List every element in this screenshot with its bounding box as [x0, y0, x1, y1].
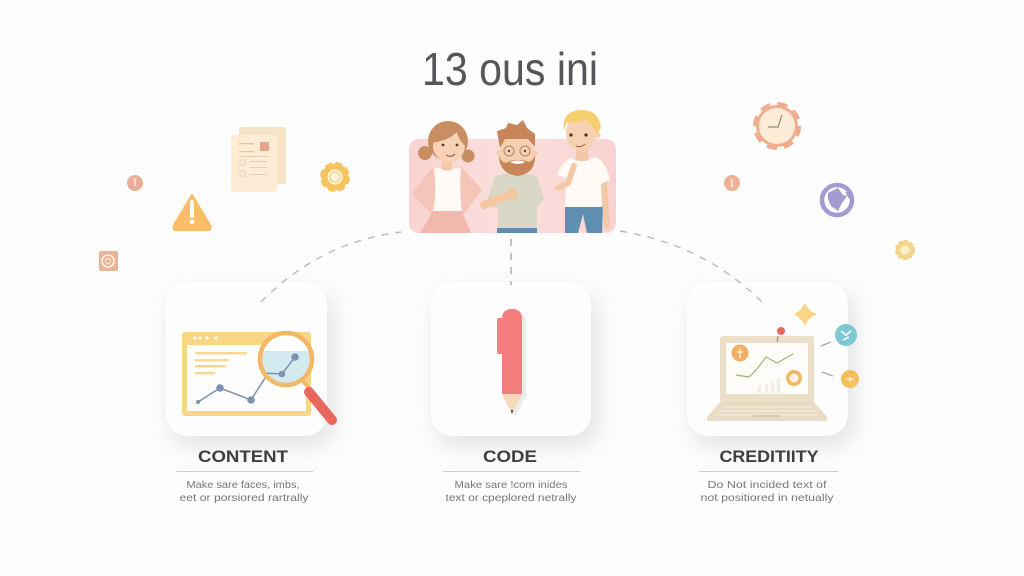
- icon: documents: [231, 127, 286, 192]
- icon: browser window with chart: [182, 332, 311, 416]
- icon: pen: [497, 309, 526, 416]
- person: blond boy: [557, 110, 610, 233]
- description: Do Not incided text of: [708, 479, 827, 491]
- person: girl: [415, 121, 479, 233]
- pink backdrop: [409, 139, 616, 233]
- icon: warning triangle: [173, 195, 211, 230]
- icon: purple globe: [822, 185, 853, 215]
- description: text or cpeplored netrally: [446, 492, 577, 504]
- connector: left dashed arc: [261, 232, 401, 302]
- icon: yellow star: [794, 303, 817, 326]
- icon: gear clock: [756, 104, 798, 148]
- description: Make sare faces, imbs,: [186, 479, 300, 491]
- description: not positiored in netually: [700, 492, 834, 504]
- connector: right dashed arc: [620, 231, 763, 303]
- icon: yellow gear: [322, 164, 348, 190]
- icon: magnifying glass: [258, 333, 332, 420]
- description: Make sare !com inides: [454, 479, 568, 491]
- icon: right info dot: [724, 175, 740, 191]
- title: 13 ous ini: [422, 43, 598, 95]
- description: [180, 479, 309, 504]
- description: [700, 479, 834, 504]
- description: eet or porsiored rartrally: [180, 492, 309, 504]
- panel: code: [431, 282, 591, 504]
- heading: CODE: [483, 447, 537, 466]
- card: [687, 282, 848, 436]
- icon: red pin: [777, 327, 785, 342]
- illustration: three people on pink panel: [409, 110, 616, 233]
- person: bearded man: [484, 120, 544, 233]
- icon: orange circle: [841, 370, 859, 388]
- icon: small yellow gear: [896, 241, 914, 259]
- card: [166, 282, 327, 436]
- panel: content: [166, 282, 332, 504]
- heading: CREDITIITY: [720, 447, 819, 466]
- description: [446, 479, 577, 504]
- icon: laptop with chart: [707, 336, 827, 421]
- card: [431, 282, 591, 436]
- panel: credibility: [687, 282, 859, 504]
- heading: CONTENT: [198, 447, 289, 466]
- icon: small square badge: [99, 251, 118, 271]
- connector: center dashed line: [510, 239, 512, 285]
- icon: left info dot: [127, 175, 143, 191]
- icon: teal circle: [835, 324, 857, 346]
